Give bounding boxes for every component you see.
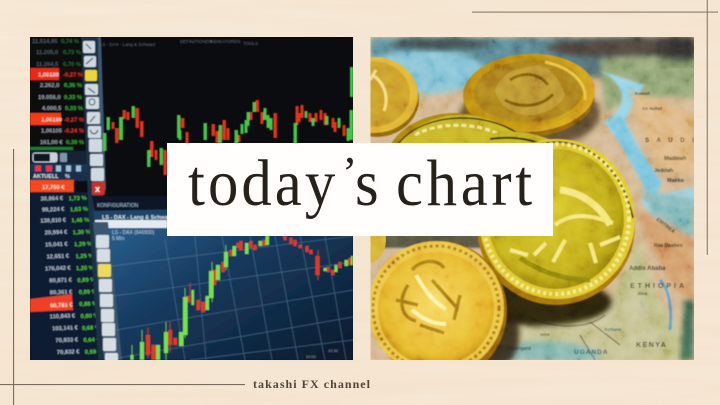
map base: ERITREA — [655, 217, 676, 235]
coin: top centre — [461, 51, 597, 140]
price table: 12,651 € — [46, 254, 70, 260]
photographic mottling — [370, 37, 695, 360]
price table: 1,06105 — [41, 128, 63, 134]
photo: trading screen with candlestick charts: DEFINITIONEN — [180, 39, 212, 44]
price table: 1,06180 — [38, 72, 59, 78]
map base: ETHIOPIA — [630, 283, 687, 290]
frame line: bottom horizontal — [0, 384, 245, 385]
price table: 0,74 % — [61, 39, 79, 45]
coin: behind large coin — [490, 130, 550, 143]
price table: 0,70 % — [63, 62, 81, 68]
price table: 0,68 % — [82, 325, 100, 332]
price table: 0,88 % — [79, 301, 97, 308]
price table: 110,843 € — [50, 313, 76, 320]
coin: bottom left — [370, 240, 508, 360]
candlesticks: upper chart — [112, 100, 346, 175]
photo: trading screen with candlestick charts: TOOLS — [243, 41, 258, 46]
map base: Ras Dashen — [654, 243, 683, 249]
price table: 0,33 % — [65, 106, 83, 112]
price table: 103,141 € — [52, 325, 79, 332]
price table: 11.514,95 — [32, 39, 58, 45]
price table — [30, 37, 103, 362]
price table: 138,810 € — [40, 218, 67, 225]
price table: 1,06180 — [41, 118, 62, 124]
photo: gold coins on a world map — [370, 37, 694, 360]
price table: 0,64 % — [83, 337, 102, 344]
dark gap between coins — [384, 236, 481, 250]
price table: 80,361 € — [50, 290, 73, 296]
photo: trading screen with candlestick charts: LS - DAX - Lang & Schwarz — [100, 42, 156, 47]
map base — [365, 37, 700, 360]
price table: 1,25 % — [75, 254, 94, 260]
price table: 0,59 % — [85, 349, 103, 356]
title text: chart — [396, 146, 533, 220]
lower chart grid — [112, 236, 353, 360]
price table: 4.000,5 — [42, 106, 62, 112]
lower blue chart panel — [100, 200, 353, 360]
photo: trading screen with candlestick charts: LS - DAX - Lang & Schwarz — [102, 215, 173, 221]
price table: 0,80 % — [81, 313, 99, 320]
price table: -0,27 % — [63, 72, 83, 78]
price table: 17,750 € — [42, 185, 65, 191]
price table: -0,24 % — [64, 128, 84, 134]
map base: Isiro — [540, 332, 550, 337]
photo: trading screen with candlestick charts: 10:00 — [306, 354, 317, 359]
title text: ’ — [342, 147, 357, 198]
price table: AKTUELL — [33, 174, 59, 180]
map base: Jeddah — [654, 168, 674, 174]
price table: 1,73 % — [68, 196, 87, 202]
price table: 176,042 € — [45, 266, 72, 273]
map base: Juba — [563, 312, 575, 318]
price table: 1,63 % — [70, 207, 88, 213]
map base: Jima — [637, 291, 648, 296]
map base: Kuwait — [635, 91, 650, 96]
coin: far left small — [370, 236, 386, 263]
title text: s — [355, 146, 379, 220]
price table: 80,871 € — [49, 278, 73, 284]
map base: KENYA — [636, 342, 667, 349]
map base: Kisangani — [507, 346, 532, 352]
candlesticks: lower chart — [146, 236, 352, 360]
photo: trading screen with candlestick charts — [30, 37, 353, 366]
price table: 1,30 % — [73, 230, 91, 236]
price table: 60,781 € — [50, 303, 73, 309]
price table: 2.262,0 — [40, 83, 59, 89]
coin: large right — [477, 139, 635, 305]
photo: trading screen with candlestick charts: INDIKATOREN — [210, 39, 240, 44]
map base: An Nafud — [642, 106, 662, 111]
price table: 1,46 % — [71, 218, 89, 224]
map base: UGANDA — [574, 349, 609, 356]
map base: Turkana — [604, 327, 622, 332]
price table: 1,29 % — [74, 242, 92, 248]
coin: top left — [370, 56, 420, 138]
map base: Makka — [667, 178, 685, 184]
price table: 11.264,5 — [36, 62, 59, 68]
price table: 70,833 € — [55, 337, 79, 344]
price table: 0,89 % — [79, 289, 97, 296]
photo: trading screen with candlestick charts: KONFIGURATION — [97, 203, 139, 209]
tool strip — [80, 37, 106, 360]
photo: trading screen with candlestick charts: 5 Min — [112, 236, 124, 242]
price table: 15,041 € — [45, 242, 69, 249]
price table: 19.056,0 — [38, 95, 61, 101]
map base: Addis Ababa — [629, 266, 666, 272]
map base: S A U D I — [645, 138, 697, 144]
price table: 1,20 % — [76, 266, 94, 272]
coin: middle behind — [391, 112, 517, 143]
frame line: top right horizontal — [472, 12, 718, 13]
price table: 20,994 € — [45, 230, 68, 237]
title panel — [167, 143, 553, 236]
photo: trading screen with candlestick charts: 10:30 — [328, 348, 339, 353]
tool strip: x — [95, 184, 100, 194]
price table: 0,39 % — [66, 140, 84, 146]
price table: -0,27 % — [64, 118, 84, 124]
frame line: left vertical — [13, 149, 14, 405]
price table: 0,33 % — [64, 95, 82, 101]
price table: 0,73 % — [63, 50, 81, 56]
price table: 30,864 € — [40, 196, 64, 203]
coin shadows — [456, 96, 604, 142]
price table: 70,832 € — [57, 349, 80, 356]
price table: 0,89 % — [77, 277, 96, 284]
map base: Madinah — [664, 156, 687, 162]
title text — [188, 146, 533, 220]
price table: % — [65, 174, 70, 180]
photo: trading screen with candlestick charts: LS - DAX (846900) — [112, 230, 155, 236]
price table: 161,00 € — [40, 140, 63, 146]
price table: 0,36 % — [64, 83, 82, 89]
channel name: takashi FX channel — [253, 377, 371, 391]
price table: 99,224 € — [42, 207, 65, 214]
price table: 11.205,0 — [36, 50, 58, 56]
frame line: right vertical — [707, 0, 708, 255]
title text: today — [188, 146, 335, 220]
